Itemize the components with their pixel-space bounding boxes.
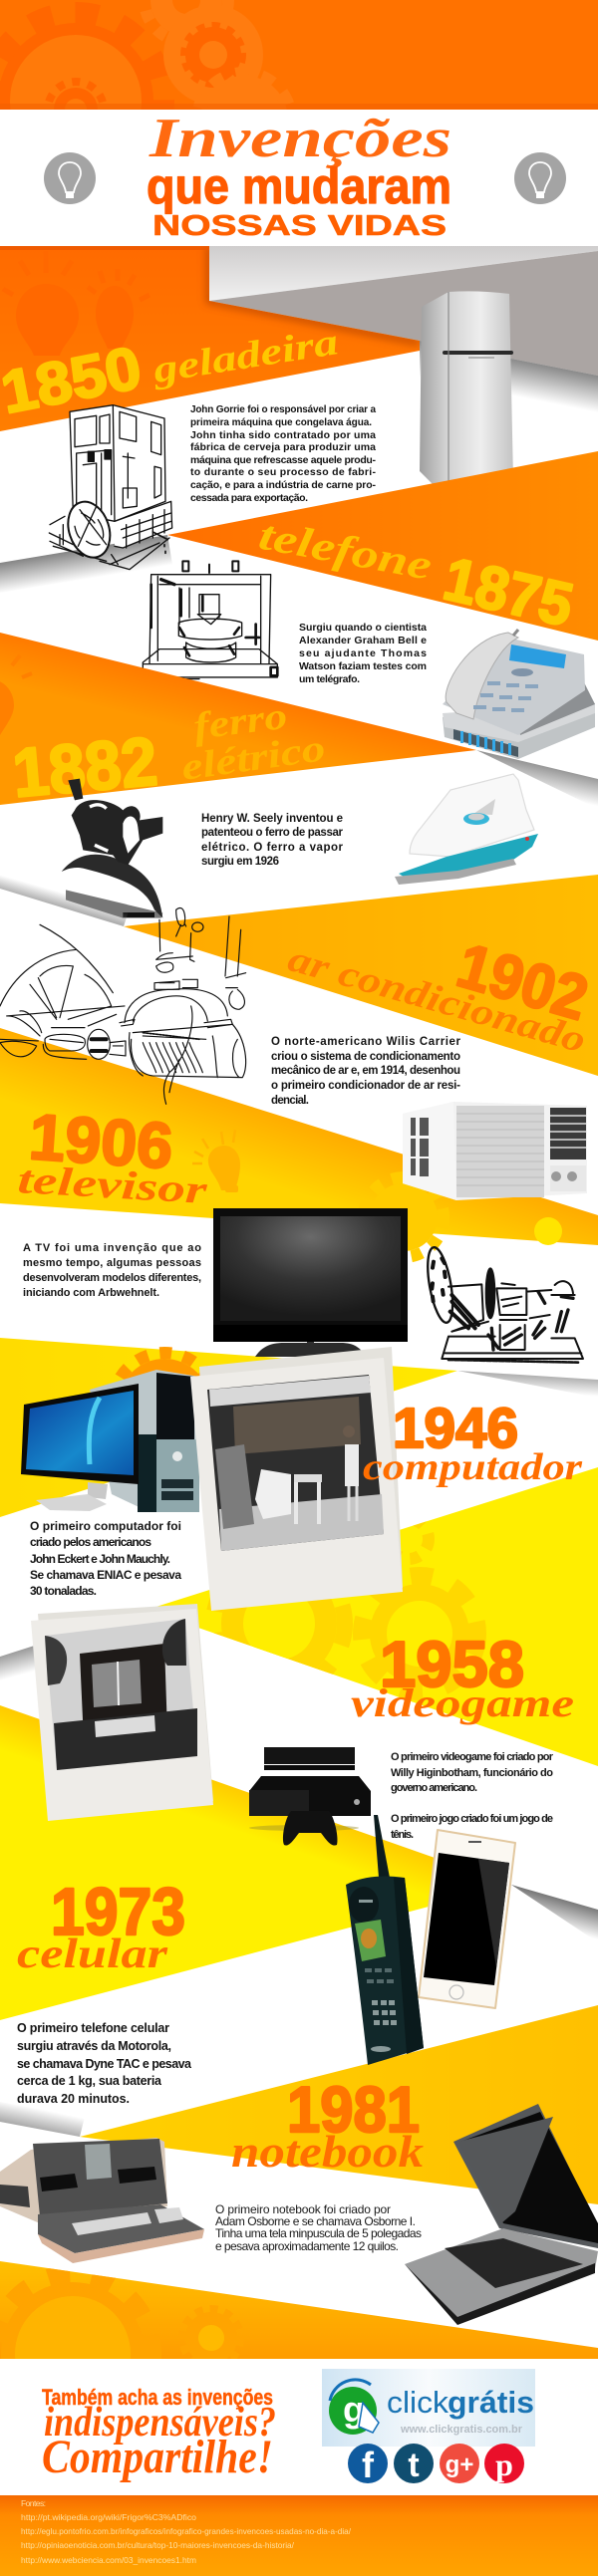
text: ferro elétrico: patenteou o ferro de passar	[201, 827, 344, 839]
heading: 1902 ar condicionado	[284, 930, 595, 1062]
text: geladeira: to durante o seu processo de fabri-	[190, 466, 377, 478]
shadow: left white wedge	[0, 535, 172, 593]
heading: 1946 computador	[363, 1397, 583, 1488]
text: telefone: Alexander Graham Bell e	[299, 635, 427, 646]
panel: header orange band with gears	[0, 0, 598, 110]
illustration: steam iron	[395, 774, 538, 885]
text: televisor: iniciando com Arbwehnelt.	[23, 1287, 159, 1299]
heading: indispensáveis: indispensáveis?	[44, 2400, 276, 2446]
text: geladeira: John tinha sido contratado por uma	[190, 429, 376, 441]
text: notebook: O primeiro notebook foi criado por	[215, 2202, 391, 2216]
text: ar condicionado: o primeiro condicionador de ar resi-	[271, 1080, 460, 1092]
text: sources list: http://opiniaoenoticia.com.br/cultura/top-10-maiores-invencoes-da-historia/	[21, 2540, 295, 2550]
title: NOSSAS VIDAS	[152, 210, 447, 242]
text: televisor	[23, 1242, 201, 1299]
text: geladeira: cação, e para a indústria de carne pro-	[190, 479, 377, 491]
panel: yellow band notebook	[80, 2005, 598, 2204]
heading: 1850 geladeira: 1850	[0, 334, 147, 426]
heading: 1906 televisor	[16, 1100, 208, 1212]
illustration: brick mobile phone	[346, 1815, 424, 2065]
heading: 1882 ferro elétrico: 1882	[10, 723, 160, 812]
icon: faded bulb on orange band	[0, 655, 32, 747]
illustration: air conditioner sketch	[0, 908, 246, 1104]
shadow: left white wedge of notebook	[0, 2102, 85, 2137]
illustration: air conditioner	[403, 1102, 587, 1200]
heading: 1882 ferro elétrico: elétrico	[178, 727, 328, 789]
text: sources list: http://pt.wikipedia.org/wiki/Frigor%C3%ADfico	[21, 2512, 196, 2522]
title: que mudaram	[147, 158, 451, 214]
heading: 1906 televisor: televisor	[16, 1157, 208, 1212]
panel: gray wedge behind refrigerator	[209, 246, 598, 413]
text: ar condicionado: criou o sistema de condicionamento	[271, 1051, 460, 1063]
icon: google plus: g+	[446, 2451, 473, 2478]
illustration: refrigerator	[420, 291, 513, 492]
text: televisor: mesmo tempo, algumas pessoas	[23, 1257, 201, 1269]
text: geladeira: primeira máquina que congelava água.	[190, 417, 372, 428]
text: ferro elétrico	[201, 813, 344, 868]
heading: 1973 celular: 1973	[51, 1875, 185, 1949]
text: sources list	[21, 2498, 352, 2565]
heading: share question: Também acha as invenções	[42, 2385, 273, 2410]
illustration: smartphone	[419, 1830, 515, 2008]
text: geladeira: cessada para exportação.	[190, 492, 308, 504]
text: computador: criado pelos americanos	[30, 1535, 151, 1549]
text: geladeira: máquina que refrescasse aquele produ-	[190, 454, 377, 466]
panel: yellow band computador	[0, 1338, 457, 1517]
icon: right light bulb	[514, 152, 566, 204]
illustration: television	[213, 1208, 408, 1357]
icon: left light bulb	[44, 152, 96, 204]
panel: yellow band videogame	[147, 1467, 598, 1766]
heading: 1973 celular	[17, 1875, 185, 1977]
text: ferro elétrico: elétrico. O ferro a vapor	[201, 842, 344, 854]
heading: 1946 computador: computador	[363, 1446, 583, 1488]
icon: google plus	[440, 2444, 479, 2483]
heading: 1958 videogame	[351, 1628, 574, 1725]
text: ar condicionado: mecânico de ar e, em 1914, desenhou	[271, 1065, 460, 1077]
heading: 1902 ar condicionado: ar condicionado	[284, 937, 590, 1062]
heading: 1981 notebook: notebook	[231, 2126, 424, 2177]
heading: 1882 ferro elétrico	[10, 695, 328, 812]
text: celular: surgiu através da Motorola,	[17, 2039, 171, 2053]
illustration: ice machine sketch	[49, 405, 172, 570]
text: ferro elétrico: surgiu em 1926	[201, 856, 279, 868]
icon: facebook: f	[362, 2445, 375, 2485]
logo: clickgrátis: www.clickgratis.com.br	[400, 2424, 523, 2436]
text: videogame: O primeiro jogo criado foi um jogo de	[391, 1813, 553, 1825]
title: Invenções	[149, 108, 451, 169]
icons: social networks	[348, 2444, 524, 2485]
text: computador: O primeiro computador foi	[30, 1519, 181, 1533]
illustration: Osborne computer	[0, 2138, 204, 2263]
panel: title white band	[0, 108, 598, 246]
heading: telefone 1875	[255, 513, 579, 639]
heading: 1981 notebook	[231, 2073, 424, 2177]
text: sources list: http://www.webciencia.com/03_invencoes1.htm	[21, 2555, 196, 2565]
text: celular: durava 20 minutos.	[17, 2092, 130, 2106]
heading: 1882 ferro elétrico: ferro	[191, 695, 289, 748]
shadow: right of orange band	[476, 750, 598, 809]
illustration: video game console	[249, 1747, 371, 1846]
icon: facebook	[348, 2444, 388, 2485]
text: telefone: Surgiu quando o cientista	[299, 622, 427, 634]
text: sources list: Fontes:	[21, 2498, 46, 2508]
text: ar condicionado: O norte-americano Wilis Carrier	[271, 1036, 461, 1048]
text: ar condicionado: dencial.	[271, 1095, 309, 1107]
title	[147, 108, 451, 242]
text: videogame: O primeiro videogame foi criado por	[391, 1751, 554, 1763]
text: ferro elétrico: Henry W. Seely inventou e	[201, 813, 343, 825]
text: ar condicionado	[271, 1036, 461, 1107]
logo: clickgrátis: g	[343, 2389, 365, 2430]
text: videogame	[391, 1751, 554, 1841]
text: telefone	[299, 622, 427, 685]
heading: 1973 celular: celular	[17, 1932, 168, 1977]
heading: telefone 1875: telefone	[255, 513, 436, 590]
text: celular: se chamava Dyne TAC e pesava	[17, 2057, 192, 2071]
logo: clickgrátis	[322, 2369, 535, 2447]
text: computador: 30 tonaladas.	[30, 1584, 97, 1598]
panel: orange band telefone	[167, 451, 598, 641]
text: celular	[17, 2021, 192, 2106]
illustration: laptop	[405, 2104, 598, 2325]
text: geladeira: John Gorrie foi o responsável por criar a	[190, 404, 376, 415]
illustration: telephone	[443, 630, 595, 759]
text: notebook: Tinha uma tela minpuscula de 5 polegadas	[215, 2226, 422, 2240]
text: videogame: tênis.	[391, 1829, 414, 1841]
text: videogame: Willy Higinbotham, funcionário do	[391, 1767, 553, 1779]
illustration: ENIAC photo	[190, 1347, 403, 1611]
shadow: left white wedge under iron	[0, 872, 129, 926]
text: notebook: e pesava aproximadamente 12 quilos.	[215, 2239, 399, 2253]
panel: orange band 1850	[0, 246, 420, 431]
heading: 1981 notebook: 1981	[287, 2073, 420, 2146]
icon: tumblr: t	[408, 2447, 420, 2484]
heading: 1906 televisor: 1906	[27, 1100, 175, 1182]
text: notebook: Adam Osborne e se chamava Osborne I.	[215, 2214, 416, 2228]
text: celular: O primeiro telefone celular	[17, 2021, 169, 2035]
panel: yellow band 1906	[0, 1028, 598, 1257]
text: computador: John Eckert e John Mauchly.	[30, 1552, 170, 1566]
text: computador: Se chamava ENIAC e pesava	[30, 1568, 181, 1582]
icon: yellow light bulb	[192, 1130, 240, 1192]
heading: 1850 geladeira: geladeira	[150, 321, 341, 391]
heading: 1850 geladeira	[0, 321, 341, 426]
text: celular: cerca de 1 kg, sua bateria	[17, 2074, 162, 2088]
panel: orange-yellow band 1902	[124, 875, 598, 1076]
text: telefone: seu ajudante Thomas	[299, 647, 427, 659]
text: televisor: desenvolveram modelos diferentes,	[23, 1272, 201, 1284]
shadow: right white wedge	[457, 1371, 598, 1398]
icon: tumblr	[394, 2444, 434, 2484]
text: geladeira: fábrica de cerveja para produzir uma	[190, 441, 376, 453]
heading: 1958 videogame: 1958	[380, 1628, 524, 1700]
text: geladeira	[190, 404, 377, 504]
text: televisor: A TV foi uma invenção que ao	[23, 1242, 201, 1254]
panel: sources footer	[0, 2495, 598, 2576]
logo: clickgrátis: grátis	[448, 2385, 534, 2420]
text: notebook	[215, 2202, 422, 2253]
illustration: telephone sketch	[143, 561, 277, 679]
text: videogame: governo americano.	[391, 1782, 477, 1794]
heading: 1958 videogame: videogame	[351, 1680, 574, 1725]
panel: bottom orange-yellow band with gears	[0, 2261, 598, 2359]
shadow: left white wedge of videogame	[0, 1610, 147, 1685]
illustration: projector sketch	[424, 1245, 583, 1363]
text: sources list: http://eglu.pontofrio.com.br/infograficos/infografico-grandes-invencoes-usadas-no-dia-a-dia/	[21, 2526, 352, 2536]
heading: 1946 computador: 1946	[393, 1397, 518, 1460]
illustration: computer	[21, 1370, 199, 1512]
shadow: right white wedge of celular	[511, 1885, 598, 1942]
panel: orange band ferro elétrico	[0, 633, 476, 805]
panel: share call to action	[0, 2359, 598, 2495]
text: computador	[30, 1519, 181, 1598]
logo: clickgrátis: click	[387, 2385, 449, 2420]
text: telefone: um telégrafo.	[299, 673, 360, 685]
icon: pinterest	[484, 2444, 524, 2483]
panel: yellow band celular	[0, 1705, 511, 2020]
illustration: flat iron sketch	[62, 779, 162, 918]
heading: compartilhe: Compartilhe!	[42, 2431, 273, 2483]
heading: telefone 1875: 1875	[438, 544, 579, 639]
text: telefone: Watson faziam testes com	[299, 660, 427, 672]
illustration: Pong photo	[31, 1604, 213, 1821]
icon: pinterest: p	[495, 2447, 513, 2482]
